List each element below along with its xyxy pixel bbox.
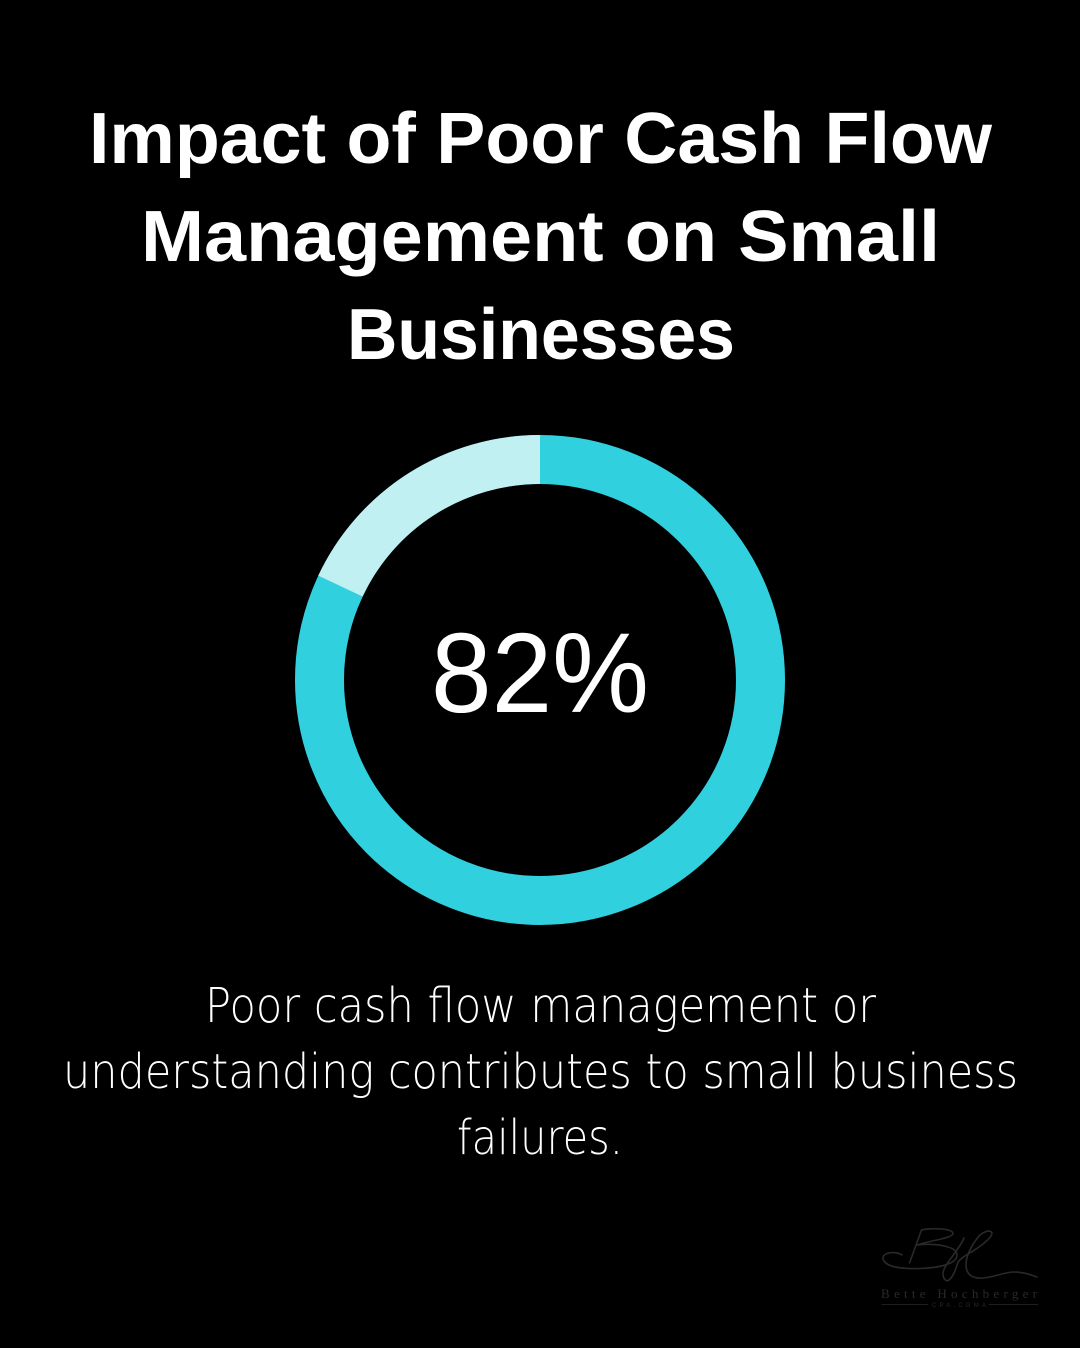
logo: Bette Hochberger signature bbox=[881, 1229, 1038, 1309]
logo credentials: CPA,CGMA bbox=[932, 1303, 986, 1309]
title bbox=[89, 99, 993, 375]
title: Businesses bbox=[347, 295, 735, 375]
logo name: Bette Hochberger bbox=[881, 1286, 1038, 1301]
description text bbox=[63, 978, 1018, 1166]
title: Management on Small bbox=[141, 197, 940, 277]
percentage value: 82% bbox=[431, 610, 649, 736]
donut chart: 82% bbox=[320, 459, 760, 900]
description text: failures. bbox=[457, 1110, 623, 1166]
title: Impact of Poor Cash Flow bbox=[89, 99, 993, 179]
description text: Poor cash flow management or bbox=[205, 978, 876, 1034]
